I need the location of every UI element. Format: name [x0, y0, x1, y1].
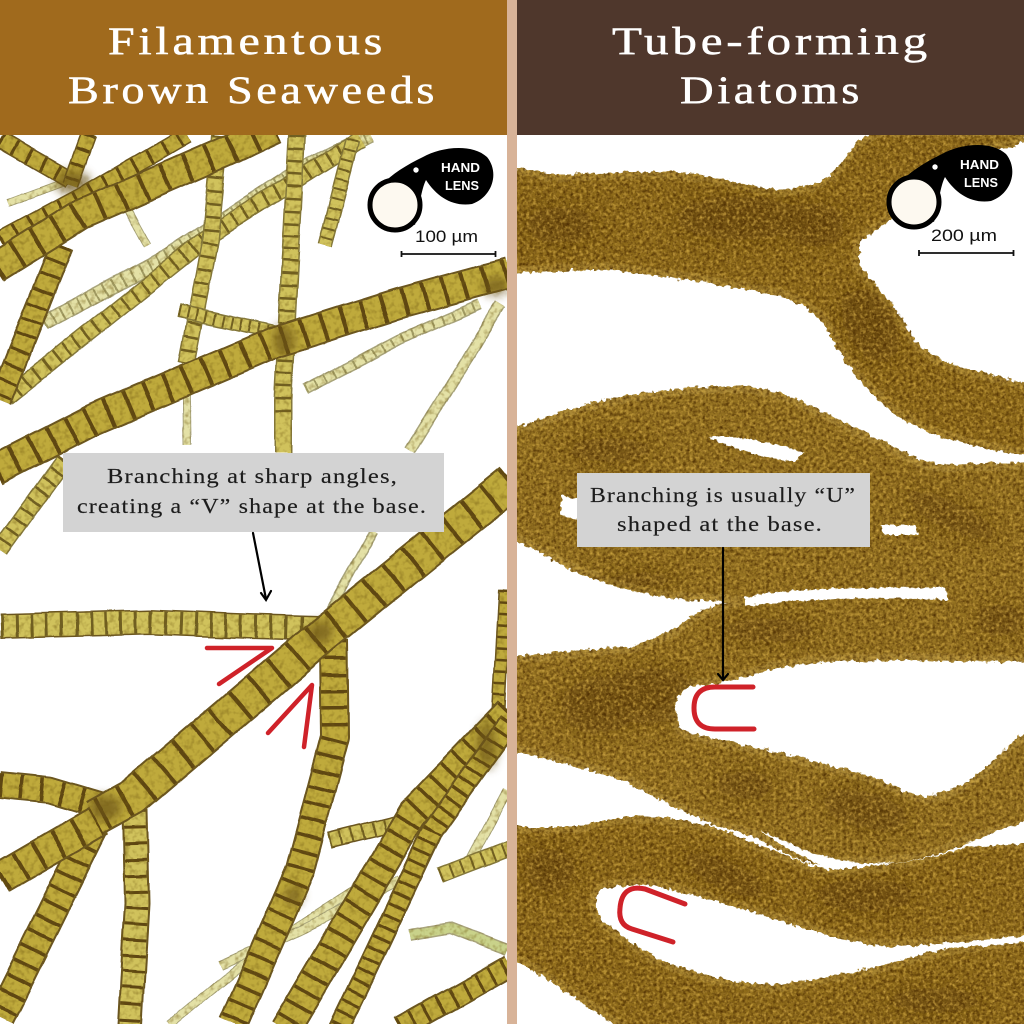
- left title bar: [0, 0, 507, 135]
- hand lens icon, left: HAND: [441, 160, 480, 175]
- right title text: Diatoms: [680, 69, 863, 112]
- lower diatom tube: [510, 820, 1024, 1024]
- right title bar: [517, 0, 1024, 135]
- callout: U-shaped branching: shaped at the base.: [617, 512, 823, 536]
- panel: filamentous brown seaweed micrograph: [0, 128, 512, 1024]
- hand lens icon, right: LENS: [964, 175, 998, 190]
- callout: V-shaped branching: [63, 453, 444, 532]
- thick filaments, top: [0, 128, 510, 470]
- right title text: Tube-forming: [612, 20, 931, 63]
- darker cell junctions: [54, 170, 507, 905]
- hand lens icon, right: [889, 145, 1012, 227]
- callout: V-shaped branching: creating a “V” shape at the base.: [77, 494, 427, 518]
- left title text: Brown Seaweeds: [68, 69, 438, 112]
- callout: V-shaped branching: Branching at sharp angles,: [107, 464, 398, 488]
- scale bar, right: 200 µm: [931, 226, 997, 245]
- middle diatom tubes: [510, 390, 1024, 861]
- callout: U-shaped branching: [577, 473, 870, 547]
- scale bar, right: [919, 226, 1014, 256]
- panel: tube-forming diatom micrograph: [510, 133, 1024, 1024]
- arrow: to V branch: [253, 533, 271, 600]
- scale bar, left: 100 µm: [415, 227, 478, 246]
- hand lens icon, left: [370, 148, 493, 230]
- left title text: Filamentous: [108, 20, 386, 63]
- left title text: [68, 20, 438, 112]
- scale bar, left: [402, 227, 496, 257]
- arrow: to U branch: [718, 548, 728, 680]
- callout: U-shaped branching: Branching is usually “U”: [590, 483, 856, 507]
- red V markers: [207, 648, 312, 747]
- main diagonal filament: [0, 482, 512, 1024]
- right title text: [612, 20, 931, 112]
- filaments, lower right: [285, 590, 510, 1024]
- hand lens icon, left: LENS: [445, 178, 479, 193]
- white gaps between tubes: [560, 436, 1024, 948]
- darker dense patches: [525, 196, 1024, 1012]
- pale background filaments: [8, 180, 507, 1024]
- upper diatom tube: [510, 133, 1024, 452]
- hand lens icon, right: HAND: [960, 157, 999, 172]
- centre divider: [507, 0, 517, 1024]
- red U markers: [620, 687, 754, 942]
- medium filaments, top: [0, 135, 370, 550]
